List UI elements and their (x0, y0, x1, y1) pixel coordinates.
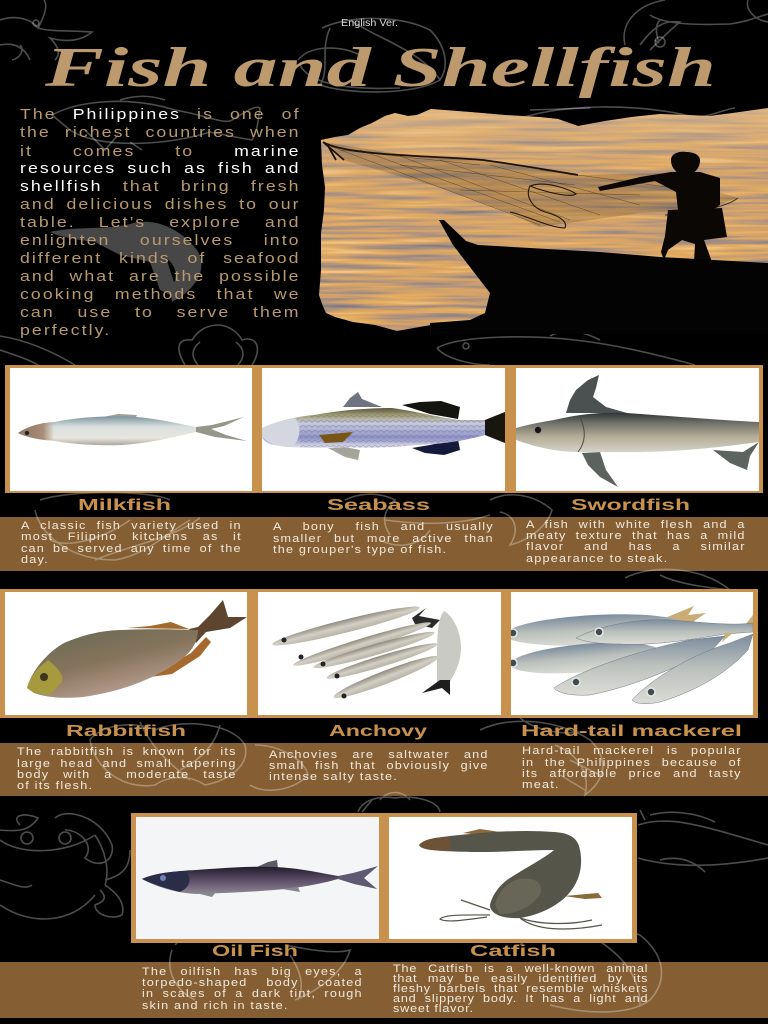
doodle: fish fragment right of row one (625, 569, 742, 590)
label: Hard-tail mackerel: Hard-tail mackerel (521, 723, 742, 740)
text: hard-tail mackerel description: Hard-tail mackerel is popular (522, 745, 742, 757)
intro paragraph: table. Let’s explore and (20, 215, 301, 231)
text: rabbitfish description: The rabbitfish is known for its (17, 746, 237, 758)
text: hard-tail mackerel description: meat. (522, 779, 560, 791)
text: oil fish description: The oilfish has big eyes, a (142, 966, 363, 978)
doodle: fish right (638, 810, 768, 872)
label: Seabass: Seabass (327, 497, 430, 514)
intro paragraph: and delicious dishes to our (20, 197, 301, 213)
text: anchovy description (269, 749, 489, 783)
doodle: squid top left (0, 0, 92, 60)
doodle: shrimp top right (624, 0, 768, 50)
text: swordfish description (526, 519, 746, 565)
fisherman silhouette (598, 152, 727, 262)
doodle: fish behind intro (52, 96, 260, 150)
text: hard-tail mackerel description: in the Philippines because of (522, 757, 742, 769)
text: oil fish description: torpedo-shaped body coated (142, 977, 363, 989)
doodle: clam under title (298, 18, 445, 92)
text: milkfish description: can be served any time of the (20, 543, 241, 555)
text: milkfish description: A classic fish variety used in (20, 520, 241, 532)
intro paragraph: cooking methods that we (20, 287, 301, 303)
text: anchovy description: intense salty taste. (269, 771, 398, 783)
text: anchovy description: Anchovies are saltwater and (269, 749, 489, 761)
photo: milkfish (10, 368, 252, 491)
text: catfish description: The Catfish is a well-known animal (393, 963, 648, 975)
text: milkfish description: day. (20, 554, 48, 566)
casting net (323, 142, 738, 228)
intro paragraph (20, 107, 301, 339)
photo: swordfish (516, 368, 759, 491)
text: catfish description: fleshy barbels that resemble whiskers (393, 983, 648, 995)
intro paragraph: and what are the possible (20, 269, 301, 285)
doodle: shrimp row two (480, 718, 603, 795)
text: seabass description: smaller but more active than (273, 533, 494, 545)
text: anchovy description: small fish that obviously give (269, 760, 489, 772)
doodle: fish tail left (0, 336, 75, 365)
doodle: mussels bottom left (170, 932, 350, 1000)
text: oil fish description: in scales of a dark tint, rough (142, 988, 363, 1000)
text: rabbitfish description (17, 746, 237, 792)
photo: oil fish (136, 817, 379, 939)
band: row three description strip (0, 962, 768, 1018)
label: Swordfish: Swordfish (571, 497, 690, 514)
text: rabbitfish description: large head and small tapering (17, 758, 237, 770)
intro paragraph: The Philippines is one of (20, 107, 301, 123)
photo: catfish (389, 817, 632, 939)
doodle: koi between rows (358, 792, 440, 812)
text: milkfish description (20, 520, 241, 566)
text: swordfish description: appearance to steak. (526, 553, 668, 565)
text: seabass description: the grouper's type of fish. (273, 544, 447, 556)
text: swordfish description: flavor and has a similar (526, 541, 746, 553)
text: catfish description: that may be easily identified by its (393, 973, 648, 985)
label: Milkfish: Milkfish (78, 497, 171, 514)
doodle: shrimp in intro (50, 222, 201, 302)
panel: row one photo frame (5, 365, 763, 493)
text: catfish description: sweet flavor. (393, 1003, 474, 1015)
band: row one description strip (0, 517, 768, 571)
intro paragraph: enlighten ourselves into (20, 233, 301, 249)
text: oil fish description (142, 966, 363, 1012)
doodle: mussels bottom right (520, 928, 661, 1012)
label: Oil Fish: Oil Fish (212, 943, 298, 960)
text: swordfish description: meaty texture that has a mild (526, 530, 746, 542)
panel: row two photo frame (0, 589, 758, 718)
photo: anchovy (258, 592, 501, 715)
hero photo: fisherman casting a net at sunset (319, 108, 768, 334)
doodle: long fish (437, 332, 695, 365)
text: rabbitfish description: body with a moderate taste (17, 769, 237, 781)
sunset water (318, 106, 768, 334)
doodle: clam over row one band (35, 492, 200, 560)
label: Anchovy: Anchovy (329, 723, 427, 740)
text: rabbitfish description: of its flesh. (17, 780, 93, 792)
intro paragraph: can use to serve them (20, 305, 301, 321)
panel: row three photo frame (131, 813, 637, 943)
doodle: crab left (0, 814, 130, 919)
intro paragraph: shellfish that bring fresh (20, 179, 301, 195)
text: hard-tail mackerel description: its affordable price and tasty (522, 768, 742, 780)
intro paragraph: resources such as fish and (20, 161, 301, 177)
label: Catfish: Catfish (470, 943, 556, 960)
text: swordfish description: A fish with white flesh and a (526, 519, 746, 531)
text: hard-tail mackerel description (522, 745, 742, 791)
doodle: fish right of intro behind photo (510, 107, 735, 122)
text: oil fish description: skin and rich in taste. (142, 1000, 289, 1012)
photo: rabbitfish (5, 592, 247, 715)
doodle: flower-like sea creature row two (90, 722, 308, 790)
boat silhouette (430, 220, 768, 334)
doodle: koi top (179, 325, 257, 365)
band: row two description strip (0, 743, 768, 796)
intro paragraph: the richest countries when (20, 125, 301, 141)
photo: seabass (262, 368, 505, 491)
text: catfish description (393, 963, 648, 1015)
text: catfish description: and slippery body. It has a light and (393, 993, 648, 1005)
intro paragraph: different kinds of seafood (20, 251, 301, 267)
intro paragraph: perfectly. (20, 323, 111, 339)
label: Rabbitfish: Rabbitfish (66, 723, 186, 740)
intro paragraph: it comes to marine (20, 144, 301, 160)
doodle: crab over row one band (345, 494, 552, 545)
text: seabass description (273, 521, 494, 556)
photo: hard-tail mackerel (511, 592, 753, 715)
text: seabass description: A bony fish and usually (273, 521, 494, 533)
small version label: English Ver. (341, 17, 398, 29)
text: milkfish description: most Filipino kitchens as it (20, 531, 241, 543)
